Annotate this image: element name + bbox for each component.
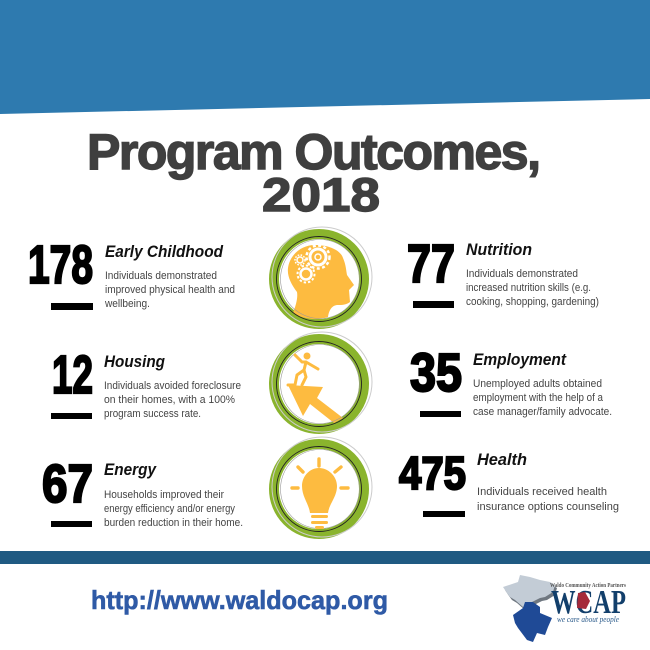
panel: early childhood: Individuals demonstrated [105, 270, 217, 282]
panel: energy: burden reduction in their home. [104, 517, 243, 529]
panel: nutrition [407, 234, 599, 308]
panel: employment: employment with the help of a [473, 392, 603, 404]
panel: housing: Individuals avoided foreclosure [104, 380, 241, 392]
panel: early childhood: Early Childhood [105, 243, 224, 261]
title [87, 124, 541, 221]
panel: nutrition: Nutrition [466, 241, 532, 259]
panel: energy: 67 [42, 454, 93, 514]
panel: health [399, 447, 619, 517]
logo: WCAP: we care about people [557, 614, 619, 624]
icon: head with gears [272, 227, 372, 327]
panel: nutrition: 77 [407, 234, 455, 294]
panel: housing: program success rate. [104, 408, 201, 420]
panel: health: Individuals received health [477, 486, 607, 498]
icon: light bulb [272, 437, 372, 537]
panel: energy: energy efficiency and/or energy [104, 503, 236, 515]
panel: housing: Housing [104, 353, 165, 371]
panel: energy [42, 454, 243, 529]
top blue banner [0, 0, 650, 114]
panel: employment: 35 [410, 343, 462, 403]
panel: nutrition: cooking, shopping, gardening) [466, 296, 599, 308]
panel: nutrition: increased nutrition skills (e.g. [466, 282, 591, 294]
panel: health: 475 [399, 447, 466, 499]
panel: employment: case manager/family advocate. [473, 406, 612, 418]
footer divider bar [0, 551, 650, 564]
logo: WCAP: Waldo Community Action Partners [550, 583, 627, 589]
panel: employment [410, 343, 612, 418]
icon: figure on arrow [272, 332, 372, 432]
panel: housing: on their homes, with a 100% [104, 394, 235, 406]
panel: housing: 12 [52, 345, 93, 405]
panel: early childhood [28, 235, 235, 310]
panel: early childhood: improved physical health and [105, 284, 235, 296]
website url: http://www.waldocap.org [91, 585, 388, 615]
title: 2018 [262, 168, 380, 221]
panel: employment: Employment [473, 351, 567, 369]
logo: WCAP [503, 575, 627, 642]
panel: early childhood: wellbeing. [104, 298, 150, 310]
panel: housing [51, 345, 241, 420]
panel: energy: Households improved their [104, 489, 224, 501]
panel: nutrition: Individuals demonstrated [466, 268, 578, 280]
panel: energy: Energy [104, 461, 157, 479]
panel: health: insurance options counseling [477, 501, 619, 513]
panel: early childhood: 178 [28, 235, 93, 295]
panel: health: Health [477, 451, 527, 469]
title: Program Outcomes, [87, 124, 541, 180]
panel: employment: Unemployed adults obtained [473, 378, 602, 390]
